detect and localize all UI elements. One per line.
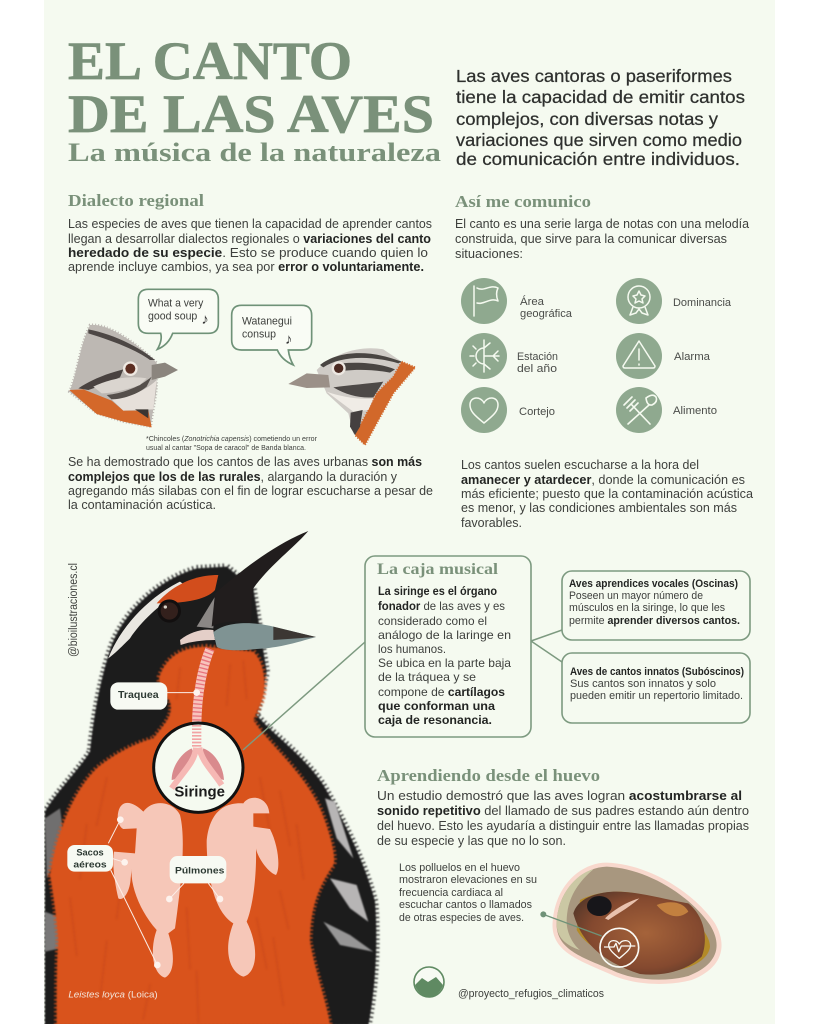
text: la siringe: considerado como el [378,614,487,628]
text: la siringe: los humanos. [378,642,446,656]
label: Sacos aéreos: Sacos [76,847,104,857]
icon: flag [461,278,507,324]
species caption: Leistes loyca (Loica) [68,990,158,1000]
panel: La caja musical [365,556,531,737]
intro text: variaciones que sirven como medio [456,130,742,150]
text: la siringe: compone de cartílagos [378,685,505,699]
text: dialecto regional: aprende incluye cambios, ya sea por error o voluntariamente. [68,260,424,274]
label: Sacos aéreos: aéreos [73,859,107,869]
icon: medal [616,278,662,324]
syringe magnifier circle [154,723,243,812]
speech bubble right: Watanegui [242,316,292,328]
illustration: loica anatomy [45,531,376,1024]
icon labels: geográfica [520,308,572,320]
panel: aves aprendices vocales: Poseen un mayor número de [569,590,703,602]
icon grid [461,278,731,433]
icon labels: Cortejo [519,406,555,418]
trachea [197,649,210,747]
text: la siringe: que conforman una [378,699,495,713]
text: aprendiendo [377,789,749,848]
heading: La caja musical: La caja musical [377,561,499,578]
heading: Dialecto regional: Dialecto regional [68,191,204,210]
text: hora del canto: amanecer y atardecer, donde la comunicación es [461,473,745,487]
bird head right [288,348,415,445]
text: la siringe: fonador de las aves y es [378,599,505,613]
text: polluelos: de otras especies de aves. [399,912,524,924]
icon labels: del año [517,363,557,375]
text: así me comunico: El canto es una serie larga de notas con una melodía [455,217,749,231]
panel: aves de cantos innatos [562,653,750,723]
speech bubble right [232,305,312,365]
text: polluelos: escuchar cantos o llamados [399,899,532,911]
panel: aves de cantos innatos: Aves de cantos innatos (Subóscinos) [570,666,744,678]
text: aves urbanas [68,455,433,512]
text: aprendiendo: sonido repetitivo del llamado de sus padres estando aún dentro [377,804,749,818]
speech bubble right: consup [242,328,276,340]
intro text: complejos, con diversas notas y [456,109,718,129]
speech bubble left: What a very [148,298,204,310]
text: dialecto regional: heredado de su especie . Esto se produce cuando quien lo [68,246,428,260]
text: polluelos: mostraron elevaciones en su [399,874,537,886]
intro text: tiene la capacidad de emitir cantos [456,87,745,107]
logo: proyecto refugios climaticos [414,967,444,997]
text: aprendiendo: del huevo. Esto les ayudaría a distinguir entre las llamadas propias [377,819,749,833]
text: aves urbanas: Se ha demostrado que los cantos de las aves urbanas son más [68,455,422,469]
text: hora del canto [461,458,753,530]
text: la siringe [378,584,511,727]
text: polluelos [399,862,537,924]
text: dialecto regional [68,217,432,274]
icon: fork and spoon [616,387,662,433]
text: aves urbanas: agregando más silabas con el fin de lograr escucharse a pesar de [68,484,433,498]
bird grey wing marks [45,798,373,952]
connector: siringe to caja musical [243,642,365,750]
title: EL CANTO [68,31,352,91]
intro text: de comunicación entre individuos. [456,149,740,169]
connectors: caja to sub-panels [531,630,562,662]
text: aprendiendo: Un estudio demostró que las aves logran acostumbrarse al [377,789,742,803]
speech bubble left [138,289,218,349]
title [68,31,441,167]
illustration: two chincol heads with speech bubbles [69,289,415,445]
icon labels: Dominancia [673,297,731,309]
icon: warning [616,333,662,379]
text: la siringe: análogo de la laringe en [378,628,511,642]
speech bubble right: ♪ [285,332,292,348]
bird orange breast [50,647,334,1024]
text: así me comunico: situaciones: [455,247,523,261]
text: polluelos: frecuencia cardiaca al [399,887,503,899]
text: la siringe: Se ubica en la parte baja [378,656,511,670]
lungs and air sacs [113,798,278,978]
text: así me comunico: construida, que sirve para la comunicar diversas [455,232,727,246]
icon labels: Alimento [673,405,717,417]
label: Traquea [110,682,167,710]
label: Sacos aéreos [67,845,113,872]
bird darker breast streaks [70,662,303,1022]
text: hora del canto: es menor, y las condiciones ambientales son más [461,501,737,515]
label connectors [108,693,220,965]
label: Traquea: Traquea [118,690,159,701]
icon labels: Alarma [674,351,710,363]
pointer line [540,911,602,936]
footnote: usual al cantar "Sopa de caracol" de Banda blanca. [146,443,306,452]
panel: aves aprendices vocales: músculos en la siringe, lo que les [569,602,725,614]
icon labels: Estación [517,351,558,363]
text: dialecto regional: llegan a desarrollar dialectos regionales o variaciones del canto [68,232,431,246]
bird crown and eye stripe [108,575,218,658]
heart rate icon [600,928,639,967]
syringe magnifier circle: Siringe [174,785,225,801]
label: Púlmones: Púlmones [175,865,224,875]
icon: heart [461,387,507,433]
heading: Aprendiendo desde el huevo: Aprendiendo desde el huevo [377,766,600,785]
bird head left [69,325,178,427]
text: aprendiendo: de su especie y las que no lo son. [377,834,566,848]
speech bubble left: good soup [148,310,197,322]
icon: sun and snowflake [461,333,507,379]
footnote [146,434,317,452]
text: la siringe: La siringe es el órgano [378,584,497,598]
text: dialecto regional: Las especies de aves que tienen la capacidad de aprender cantos [68,217,432,231]
text: hora del canto: más eficiente; puesto que la contaminación acústica [461,487,753,501]
text: polluelos: Los polluelos en el huevo [399,862,520,874]
panel: aves aprendices vocales: Aves aprendices vocales (Oscinas) [569,578,738,590]
text: aves urbanas: complejos que los de las rurales, alargando la duración y [68,470,398,484]
text: así me comunico [455,217,749,261]
panel: aves aprendices vocales: permite aprender diversos cantos. [569,615,740,627]
bird black plumage [45,567,376,1024]
icon labels [517,295,731,418]
intro text [456,66,745,169]
credit: bioilustraciones: @bioilustraciones.cl [68,563,80,657]
text: aves urbanas: la contaminación acústica. [68,498,216,512]
text: hora del canto: Los cantos suelen escucharse a la hora del [461,458,699,472]
footnote: *Chincoles (Zonotrichia capensis) cometiendo un error [146,434,317,443]
heading: Así me comunico: Así me comunico [455,192,591,211]
label dots [117,689,223,968]
speech bubble left: ♪ [201,312,209,328]
panel: aves de cantos innatos: pueden emitir un repertorio limitado. [570,690,743,702]
text: la siringe: caja de resonancia. [378,713,492,727]
bird beak [212,531,316,650]
title: La música de la naturaleza [68,138,441,167]
icon labels: Área [520,295,544,308]
title: DE LAS AVES [68,84,434,144]
panel: aves de cantos innatos: Sus cantos son innatos y solo [570,678,716,690]
intro text: Las aves cantoras o paseriformes [456,66,732,86]
text: la siringe: de la tráquea y se [378,670,476,684]
illustration: chick embryo in egg [540,863,722,984]
credit: proyecto refugios climaticos: @proyecto_refugios_climaticos [458,988,604,1000]
panel: aves aprendices vocales [562,571,750,640]
label: Púlmones [170,856,226,883]
text: hora del canto: favorables. [461,516,522,530]
